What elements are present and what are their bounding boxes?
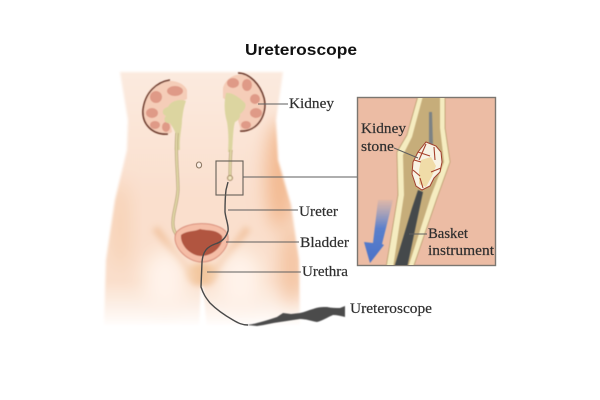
inset labels: Basket	[428, 226, 468, 242]
scope inside body	[201, 182, 248, 325]
arrow	[364, 200, 393, 263]
right kidney	[223, 73, 265, 152]
inset labels: instrument	[428, 243, 494, 259]
organ labels: Ureter	[299, 204, 338, 220]
inset labels: stone	[361, 139, 394, 155]
zoom box	[216, 161, 243, 195]
organ labels: Kidney	[289, 96, 335, 112]
leader lines	[207, 104, 357, 272]
ureters	[173, 133, 232, 236]
panel: inset	[358, 96, 496, 268]
organ labels: Bladder	[300, 235, 349, 251]
organ labels	[289, 96, 432, 317]
ureter wall	[386, 96, 450, 268]
torso illustration	[100, 70, 345, 330]
inset labels: Kidney	[361, 121, 407, 137]
organ labels: Urethra	[302, 264, 349, 280]
inset labels	[361, 121, 494, 259]
ureteroscope handle	[247, 306, 345, 326]
icon: navel	[196, 162, 202, 168]
icon: kidney stone with basket	[412, 142, 442, 190]
infographic	[104, 44, 496, 327]
bladder	[175, 224, 228, 262]
title: Ureteroscope	[245, 42, 357, 59]
leader lines	[394, 148, 427, 234]
left kidney	[142, 80, 187, 150]
instrument	[429, 112, 433, 145]
organ labels: Ureteroscope	[350, 301, 432, 317]
